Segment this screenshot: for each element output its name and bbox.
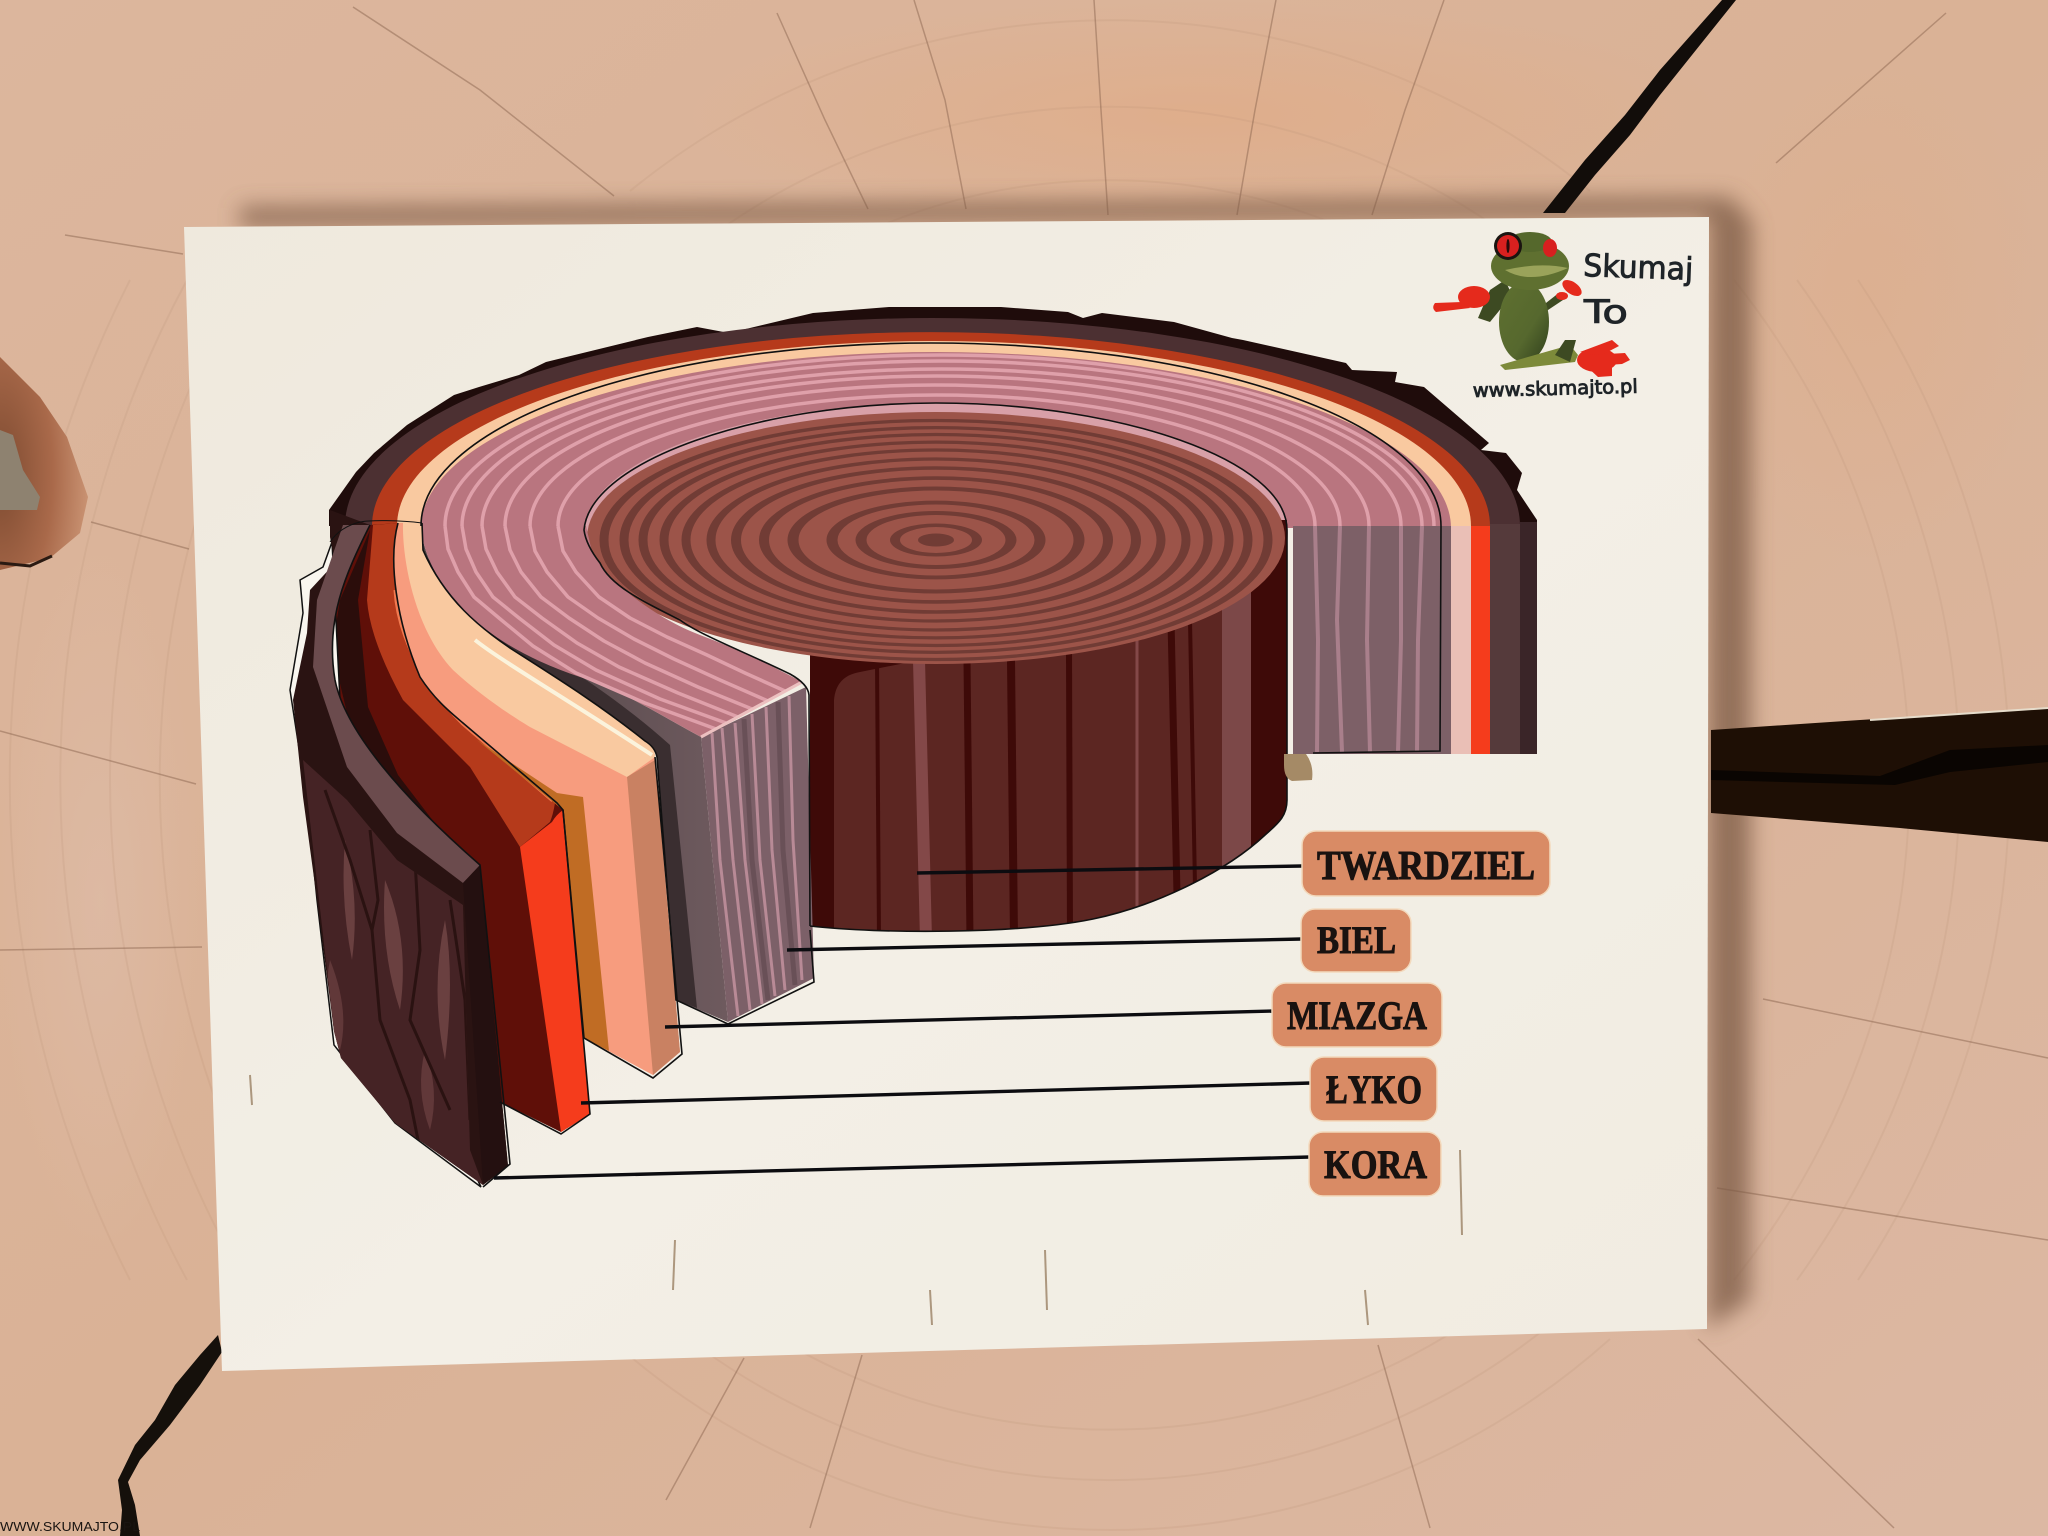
back ring: sapwood top [421, 352, 1451, 528]
cambium: miazga [394, 523, 680, 1075]
label: TWARDZIEL: TWARDZIEL [1317, 842, 1535, 888]
label: KORA [1309, 1132, 1441, 1196]
heartwood side [810, 520, 1287, 930]
bark silhouette [293, 510, 508, 1185]
sapwood end face [701, 687, 814, 1022]
sapwood: biel [421, 526, 814, 1022]
phloem dark base [332, 523, 590, 1132]
back ring: cambium [397, 341, 1471, 526]
phloem: lyko [332, 523, 590, 1132]
pale halo around heartwood [584, 403, 1288, 663]
leader line: kora [494, 1157, 1310, 1178]
sapwood top sweep [421, 526, 802, 737]
die-cut outlines [330, 343, 1441, 1187]
right cut face: layered bands [1293, 522, 1537, 754]
diagram: trunk cross-section [280, 307, 1537, 1200]
phloem orange-red top [367, 523, 555, 847]
label: BIEL: BIEL [1317, 919, 1396, 962]
back ring: bark outer edge [329, 307, 1537, 526]
logo wordmark: www.skumajto.pl [1473, 376, 1638, 402]
logo wordmark: To [1583, 293, 1628, 331]
knot on left edge [0, 357, 88, 570]
phloem dark wedge [332, 530, 440, 830]
leader line: biel [787, 939, 1302, 950]
frog hands and feet [1433, 277, 1630, 377]
sapwood outer surface [421, 526, 728, 1022]
heartwood top with growth rings [587, 412, 1285, 664]
leader line: miazga [665, 1011, 1273, 1027]
die-cut halo around bark [290, 542, 481, 1187]
label: TWARDZIEL [1302, 831, 1550, 896]
back ring: bark [345, 318, 1520, 526]
heartwood: twardziel [584, 403, 1300, 960]
board shadow [240, 197, 1752, 1329]
frog illustration [1433, 232, 1630, 377]
bark: kora [280, 510, 508, 1200]
back ring: phloem [372, 332, 1490, 526]
crack: bottom left [118, 1335, 222, 1536]
sapwood growth rings (front sweep) [445, 526, 785, 729]
cambium body [394, 523, 680, 1075]
label: KORA: KORA [1324, 1142, 1427, 1187]
bark side face with texture [303, 760, 483, 1185]
logo wordmark: Skumaj [1583, 248, 1694, 288]
logo: Skumaj To frog [1433, 232, 1694, 402]
label: MIAZGA: MIAZGA [1287, 993, 1427, 1038]
crack: top right [1543, 0, 1736, 213]
cambium cream top band [403, 523, 655, 777]
watermark text: WWW.SKUMAJTO.PL [0, 1519, 140, 1534]
label: LYKO: ŁYKO [1326, 1067, 1422, 1112]
label: MIAZGA [1272, 983, 1442, 1047]
label: BIEL [1301, 909, 1411, 972]
bark dark end strip [463, 865, 508, 1185]
cambium orange stripe [477, 740, 609, 1051]
label: LYKO [1310, 1057, 1437, 1121]
sapwood growth rings (back) [445, 355, 1434, 526]
phloem bright red face [520, 810, 590, 1132]
leader line: twardziel [917, 866, 1302, 873]
sapwood shadow strip [423, 550, 697, 1008]
wooden board [184, 217, 1709, 1371]
bark top band [313, 525, 480, 883]
leader line: lyko [581, 1083, 1311, 1103]
crack: wide right gap [1711, 708, 2048, 842]
icon: wooden peg [1284, 754, 1312, 781]
cambium side shade [627, 760, 680, 1075]
logo wordmark [1473, 248, 1694, 402]
